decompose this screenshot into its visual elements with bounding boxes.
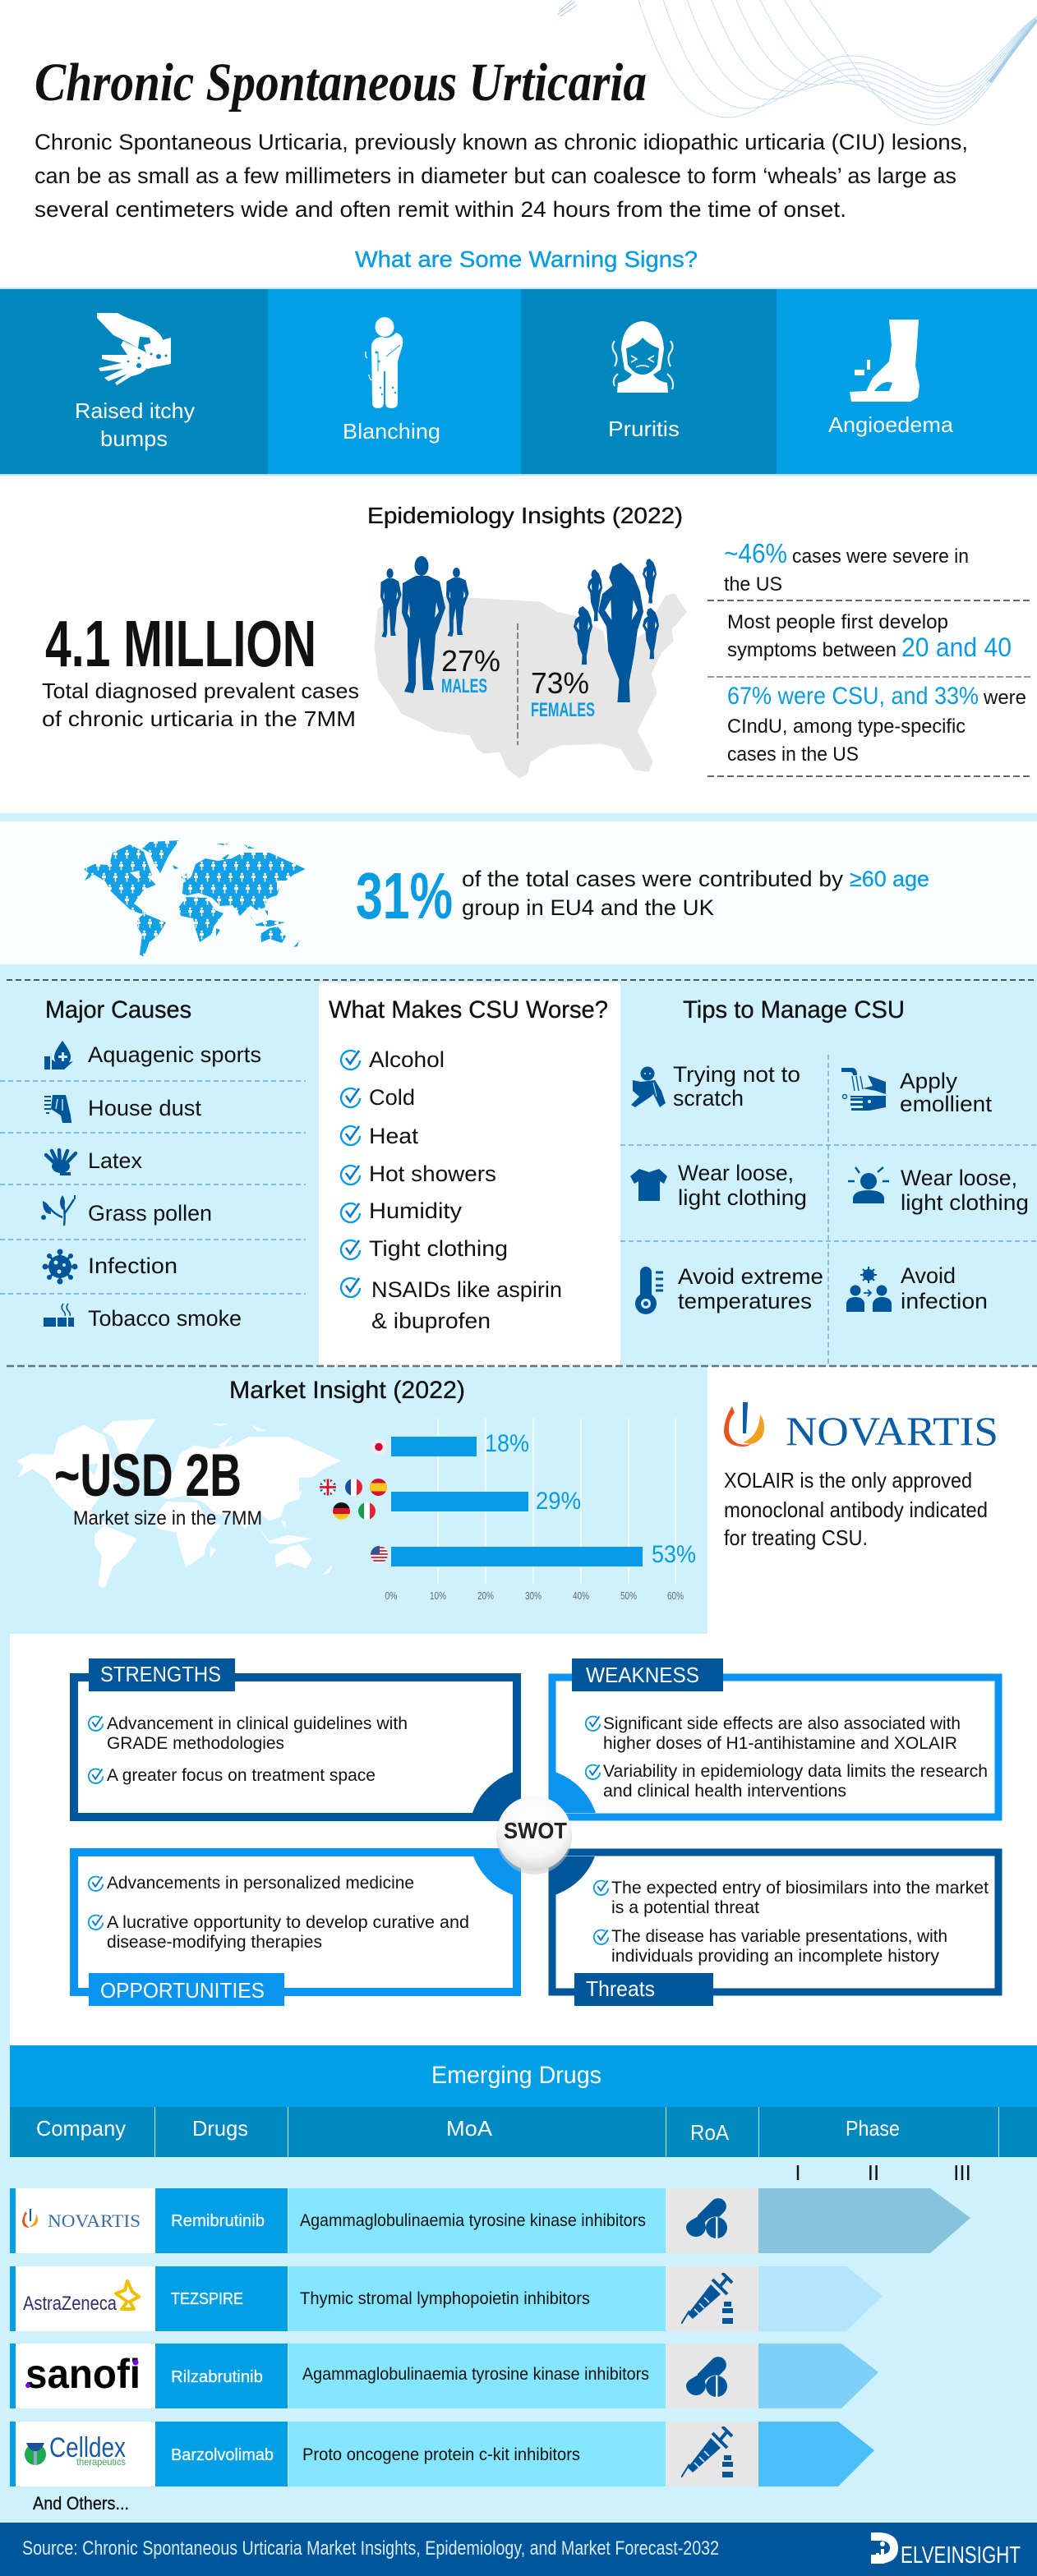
- row: Novartis Remibrutinib: Agammaglobulinaemia tyrosine kinase inhibitors: [300, 2211, 646, 2230]
- males share: MALES: [441, 675, 487, 697]
- fact: CSU vs CIndU: were: [983, 687, 1026, 709]
- stat text: of the total cases were contributed by: [462, 867, 844, 891]
- stat: 4.1 million: 4.1 MILLION: [45, 607, 316, 680]
- checklist: [341, 1047, 562, 1333]
- box: weakness: [549, 1658, 1002, 1820]
- axis labels: 60%: [667, 1589, 684, 1602]
- box: weakness: Significant side effects are also associated with: [603, 1714, 961, 1733]
- flag: UK: [320, 1479, 336, 1495]
- tip: avoid infection: Avoid: [901, 1263, 956, 1288]
- tip: avoid infection: [846, 1263, 988, 1313]
- row: AstraZeneca TEZSPIRE: [10, 2266, 883, 2331]
- heading: epidemiology: Epidemiology Insights (2022): [367, 503, 683, 528]
- row: Sanofi Rilzabrutinib: Rilzabrutinib: [171, 2368, 263, 2386]
- SWOT center badge: [496, 1796, 572, 1874]
- label: aquagenic sports: Aquagenic sports: [88, 1042, 261, 1067]
- stat: 4.1 million: Total diagnosed prevalent cases: [42, 678, 359, 703]
- label: raised itchy bumps: [75, 398, 195, 451]
- axis labels: 50%: [620, 1589, 637, 1602]
- flag: Germany: [333, 1502, 350, 1520]
- logo: Celldex: Celldex: [49, 2432, 126, 2463]
- box: strengths: [70, 1658, 521, 1821]
- flag: France: [345, 1479, 362, 1496]
- box: threats: The disease has variable presentations, with: [611, 1927, 947, 1946]
- heading: What Makes CSU Worse?: [329, 996, 608, 1024]
- row: Celldex Barzolvolimab: Proto oncogene protein c-kit inhibitors: [302, 2445, 580, 2464]
- fact: first symptoms: Most people first develop: [727, 611, 948, 633]
- box: threats: is a potential threat: [611, 1898, 759, 1917]
- checklist: Hot showers: [369, 1162, 496, 1186]
- logo: Novartis: NOVARTIS: [786, 1408, 998, 1454]
- label: raised itchy bumps: Raised itchy: [75, 398, 195, 423]
- fact: first symptoms: 20 and 40: [901, 632, 1012, 662]
- stat text: 31%: [356, 859, 453, 932]
- box: opportunities: [70, 1848, 521, 2006]
- axis labels: [385, 1589, 684, 1602]
- row: Celldex Barzolvolimab: [10, 2422, 874, 2486]
- stat: 4.1 million: of chronic urticaria in the 7MM: [42, 706, 356, 731]
- note: and others: And Others...: [33, 2493, 129, 2514]
- table header row: Phase: [846, 2116, 900, 2141]
- fact: first symptoms: symptoms between: [727, 639, 896, 661]
- box: opportunities: A lucrative opportunity to develop curative and: [107, 1913, 469, 1932]
- logo: AstraZeneca: AstraZeneca: [23, 2293, 118, 2315]
- title: Chronic Spontaneous Urticaria: [35, 53, 647, 113]
- fact: CSU vs CIndU: [727, 683, 1026, 766]
- logo: AstraZeneca: [23, 2281, 139, 2315]
- heading: Tips to Manage CSU: [683, 996, 905, 1024]
- tip: loose light clothing shirt: Wear loose,: [678, 1161, 794, 1185]
- box: weakness: higher doses of H1-antihistamine and XOLAIR: [603, 1734, 957, 1753]
- logo: Novartis: NOVARTIS: [48, 2210, 141, 2231]
- text: XOLAIR: monoclonal antibody indicated: [724, 1497, 988, 1522]
- box: opportunities: OPPORTUNITIES: [100, 1978, 265, 2003]
- stat: market size: ~USD 2B: [54, 1442, 242, 1509]
- label: grass pollen: Grass pollen: [88, 1201, 212, 1226]
- axis labels: 30%: [525, 1589, 542, 1602]
- heading: Market Insight (2022): [229, 1377, 465, 1404]
- intro text: Chronic Spontaneous Urticaria, previously known as chronic idiopathic urticaria (CIU) lesions,: [35, 130, 968, 154]
- icon: angioedema foot: [850, 320, 919, 402]
- callouts: epidemiology facts: [707, 538, 1030, 776]
- tip: loose light clothing person: light clothing: [901, 1190, 1029, 1215]
- icon: pruritis face: [613, 321, 673, 393]
- panel: emerging drugs: [0, 2045, 1037, 2523]
- text: XOLAIR: XOLAIR is the only approved: [724, 1468, 972, 1493]
- panel: warning signs band: [0, 288, 1037, 476]
- fact: first symptoms: [727, 611, 1012, 662]
- icon: raised bumps hands: [97, 313, 171, 385]
- bar: US 53%: [391, 1541, 696, 1568]
- background: [0, 2157, 1037, 2523]
- intro text: [35, 130, 968, 222]
- label: house dust: House dust: [88, 1096, 201, 1120]
- bar chart: [320, 1419, 696, 1602]
- panel: major causes: [0, 996, 306, 1331]
- box: threats: individuals providing an incomplete history: [611, 1947, 939, 1966]
- logo: Celldex: therapeutics: [76, 2456, 126, 2468]
- icon: house dust: [44, 1095, 71, 1123]
- divider band: [0, 813, 1037, 821]
- label: angioedema: Angioedema: [828, 412, 954, 437]
- logo: Novartis: [724, 1402, 998, 1454]
- axis labels: 10%: [430, 1589, 446, 1602]
- heading: Major Causes: [45, 996, 191, 1024]
- phase labels: III: [953, 2160, 971, 2185]
- checklist: & ibuprofen: [371, 1309, 491, 1333]
- tip: loose light clothing person: [848, 1166, 1029, 1215]
- tip: avoid infection: infection: [901, 1289, 988, 1313]
- males share: [441, 644, 500, 697]
- label: raised itchy bumps: bumps: [100, 426, 168, 451]
- fact: CSU vs CIndU: cases in the US: [727, 743, 859, 766]
- header band: Emerging Drugs: [431, 2062, 601, 2089]
- panel: market insight: [16, 1377, 696, 1602]
- table header row: [10, 2107, 1037, 2157]
- bar: Japan 18%: 18%: [485, 1430, 529, 1457]
- tip: trying not to scratch: Trying not to: [673, 1062, 800, 1087]
- row: Celldex Barzolvolimab: Barzolvolimab: [171, 2446, 274, 2464]
- label: latex: Latex: [88, 1148, 142, 1173]
- table header row: Drugs: [192, 2116, 248, 2141]
- fact: severe cases: [724, 538, 969, 596]
- decorative wave lines: [557, 0, 1037, 125]
- tip: apply emollient: Apply: [900, 1069, 958, 1093]
- box: opportunities: Advancements in personalized medicine: [107, 1874, 414, 1893]
- tip: trying not to scratch: [631, 1062, 800, 1111]
- checklist: Alcohol: [369, 1047, 445, 1072]
- label: infection: Infection: [88, 1254, 177, 1278]
- light background for causes and market: [0, 964, 1037, 1367]
- label: tobacco smoke: Tobacco smoke: [88, 1306, 242, 1331]
- panel: tips to manage CSU: [620, 996, 1037, 1366]
- panel: Novartis XOLAIR note: [724, 1402, 998, 1550]
- stat: market size: Market size in the 7MM: [73, 1507, 262, 1530]
- footer: [0, 2523, 1037, 2576]
- US map shape: [376, 596, 684, 776]
- flag: USA: [371, 1546, 388, 1563]
- stat text: group in EU4 and the UK: [462, 895, 714, 920]
- checklist: Tight clothing: [369, 1236, 508, 1261]
- bar: EU4 and UK 29%: 29%: [536, 1488, 581, 1515]
- tip: loose light clothing shirt: light clothing: [678, 1185, 807, 1210]
- table header row: MoA: [446, 2116, 493, 2141]
- checklist: Cold: [369, 1085, 415, 1110]
- phase labels: I: [795, 2160, 801, 2185]
- female silhouettes: [574, 559, 659, 702]
- icon: tobacco smoke: [44, 1304, 74, 1327]
- text: XOLAIR: for treating CSU.: [724, 1525, 868, 1550]
- source text: Source: Chronic Spontaneous Urticaria Market Insights, Epidemiology, and Market Forecast-2032: [22, 2537, 719, 2560]
- row: Novartis Remibrutinib: Remibrutinib: [171, 2212, 265, 2230]
- tip: loose light clothing shirt: [630, 1161, 807, 1210]
- fact: severe cases: ~46%: [724, 538, 787, 568]
- panel: SWOT: [74, 1658, 998, 2006]
- icon: latex gloves: [46, 1150, 76, 1175]
- box: threats: Threats: [586, 1976, 655, 2001]
- box: strengths: Advancement in clinical guidelines with: [107, 1714, 408, 1733]
- icon: water drop in hand: [44, 1041, 73, 1070]
- tip: loose light clothing person: Wear loose,: [901, 1166, 1017, 1190]
- axis labels: 0%: [385, 1589, 398, 1602]
- tip: avoid extreme temperatures: [635, 1264, 823, 1314]
- table header row: Company: [36, 2116, 126, 2141]
- row: AstraZeneca TEZSPIRE: TEZSPIRE: [171, 2290, 243, 2308]
- icon: infection virus: [43, 1249, 77, 1285]
- box: weakness: Variability in epidemiology data limits the research: [603, 1762, 988, 1781]
- fact: CSU vs CIndU: 67% were CSU, and 33%: [727, 683, 979, 710]
- bar: Japan 18%: [391, 1430, 529, 1457]
- axis labels: 20%: [477, 1589, 494, 1602]
- females share: [531, 666, 595, 721]
- header band: [10, 2045, 1037, 2107]
- panel: what makes CSU worse: [319, 982, 620, 1367]
- axis labels: 40%: [573, 1589, 589, 1602]
- fact: severe cases: cases were severe in: [792, 545, 969, 568]
- box: strengths: STRENGTHS: [100, 1662, 221, 1686]
- intro text: can be as small as a few millimeters in diameter but can coalesce to form ‘wheals’ as large as: [35, 163, 956, 188]
- females share: FEMALES: [531, 699, 595, 721]
- females share: 73%: [531, 666, 589, 700]
- row: Sanofi Rilzabrutinib: Agammaglobulinaemia tyrosine kinase inhibitors: [302, 2365, 649, 2384]
- phase labels: [795, 2160, 971, 2185]
- fact: CSU vs CIndU: CIndU, among type-specific: [727, 715, 966, 738]
- icon: world map of people: [84, 840, 306, 957]
- heading: warning signs: What are Some Warning Signs?: [355, 246, 698, 272]
- flag: Spain: [370, 1479, 387, 1496]
- tip: trying not to scratch: scratch: [673, 1086, 744, 1111]
- box: threats: [549, 1848, 1002, 2006]
- stat: market size: [54, 1442, 262, 1530]
- SWOT center badge: SWOT: [504, 1818, 567, 1843]
- table header row: RoA: [690, 2120, 730, 2145]
- row: Novartis Remibrutinib: [10, 2188, 970, 2253]
- row: Sanofi Rilzabrutinib: [10, 2344, 878, 2408]
- logo: Sanofi: sanofi: [25, 2351, 141, 2397]
- stat text: ≥60 age: [850, 867, 929, 891]
- tip: apply emollient: [841, 1068, 993, 1116]
- logo: DelveInsight: [871, 2532, 1021, 2569]
- male silhouettes: [380, 556, 468, 693]
- flag: Japan: [371, 1439, 387, 1456]
- intro text: several centimeters wide and often remit within 24 hours from the time of onset.: [35, 197, 846, 222]
- checklist: Humidity: [369, 1198, 463, 1223]
- flag: Italy: [358, 1502, 376, 1520]
- logo: Novartis: [22, 2209, 141, 2231]
- chart: US map with male and female shares: [376, 556, 684, 776]
- label: pruritis: Pruritis: [608, 416, 680, 441]
- tip: avoid extreme temperatures: Avoid extreme: [678, 1264, 823, 1289]
- phase labels: II: [868, 2160, 879, 2185]
- row: AstraZeneca TEZSPIRE: Thymic stromal lymphopoietin inhibitors: [300, 2289, 590, 2308]
- males share: 27%: [441, 644, 500, 678]
- label: blanching: Blanching: [343, 419, 440, 444]
- box: strengths: GRADE methodologies: [107, 1734, 284, 1753]
- bar: US 53%: 53%: [652, 1541, 696, 1568]
- logo: Celldex: [25, 2432, 126, 2468]
- stat: 4.1 million: [42, 607, 359, 731]
- box: opportunities: disease-modifying therapies: [107, 1933, 322, 1952]
- bar: EU4 and UK 29%: [391, 1488, 581, 1515]
- stat text: [356, 859, 929, 932]
- box: strengths: A greater focus on treatment space: [107, 1766, 376, 1785]
- box: threats: The expected entry of biosimilars into the market: [611, 1879, 989, 1898]
- box: weakness: and clinical health interventions: [603, 1782, 846, 1801]
- checklist: Heat: [369, 1124, 419, 1148]
- text: XOLAIR: [724, 1468, 988, 1550]
- fact: severe cases: the US: [724, 573, 782, 596]
- checklist: NSAIDs like aspirin: [371, 1277, 562, 1302]
- box: weakness: WEAKNESS: [586, 1663, 699, 1687]
- section dashed rules: [7, 980, 1037, 1366]
- tip: apply emollient: emollient: [900, 1092, 993, 1116]
- panel: 31 percent age stat: [0, 821, 1037, 964]
- world map background: [16, 1419, 341, 1589]
- icon: grass pollen: [41, 1195, 76, 1226]
- icon: blanching person: [366, 317, 403, 408]
- tip: avoid extreme temperatures: temperatures: [678, 1289, 812, 1313]
